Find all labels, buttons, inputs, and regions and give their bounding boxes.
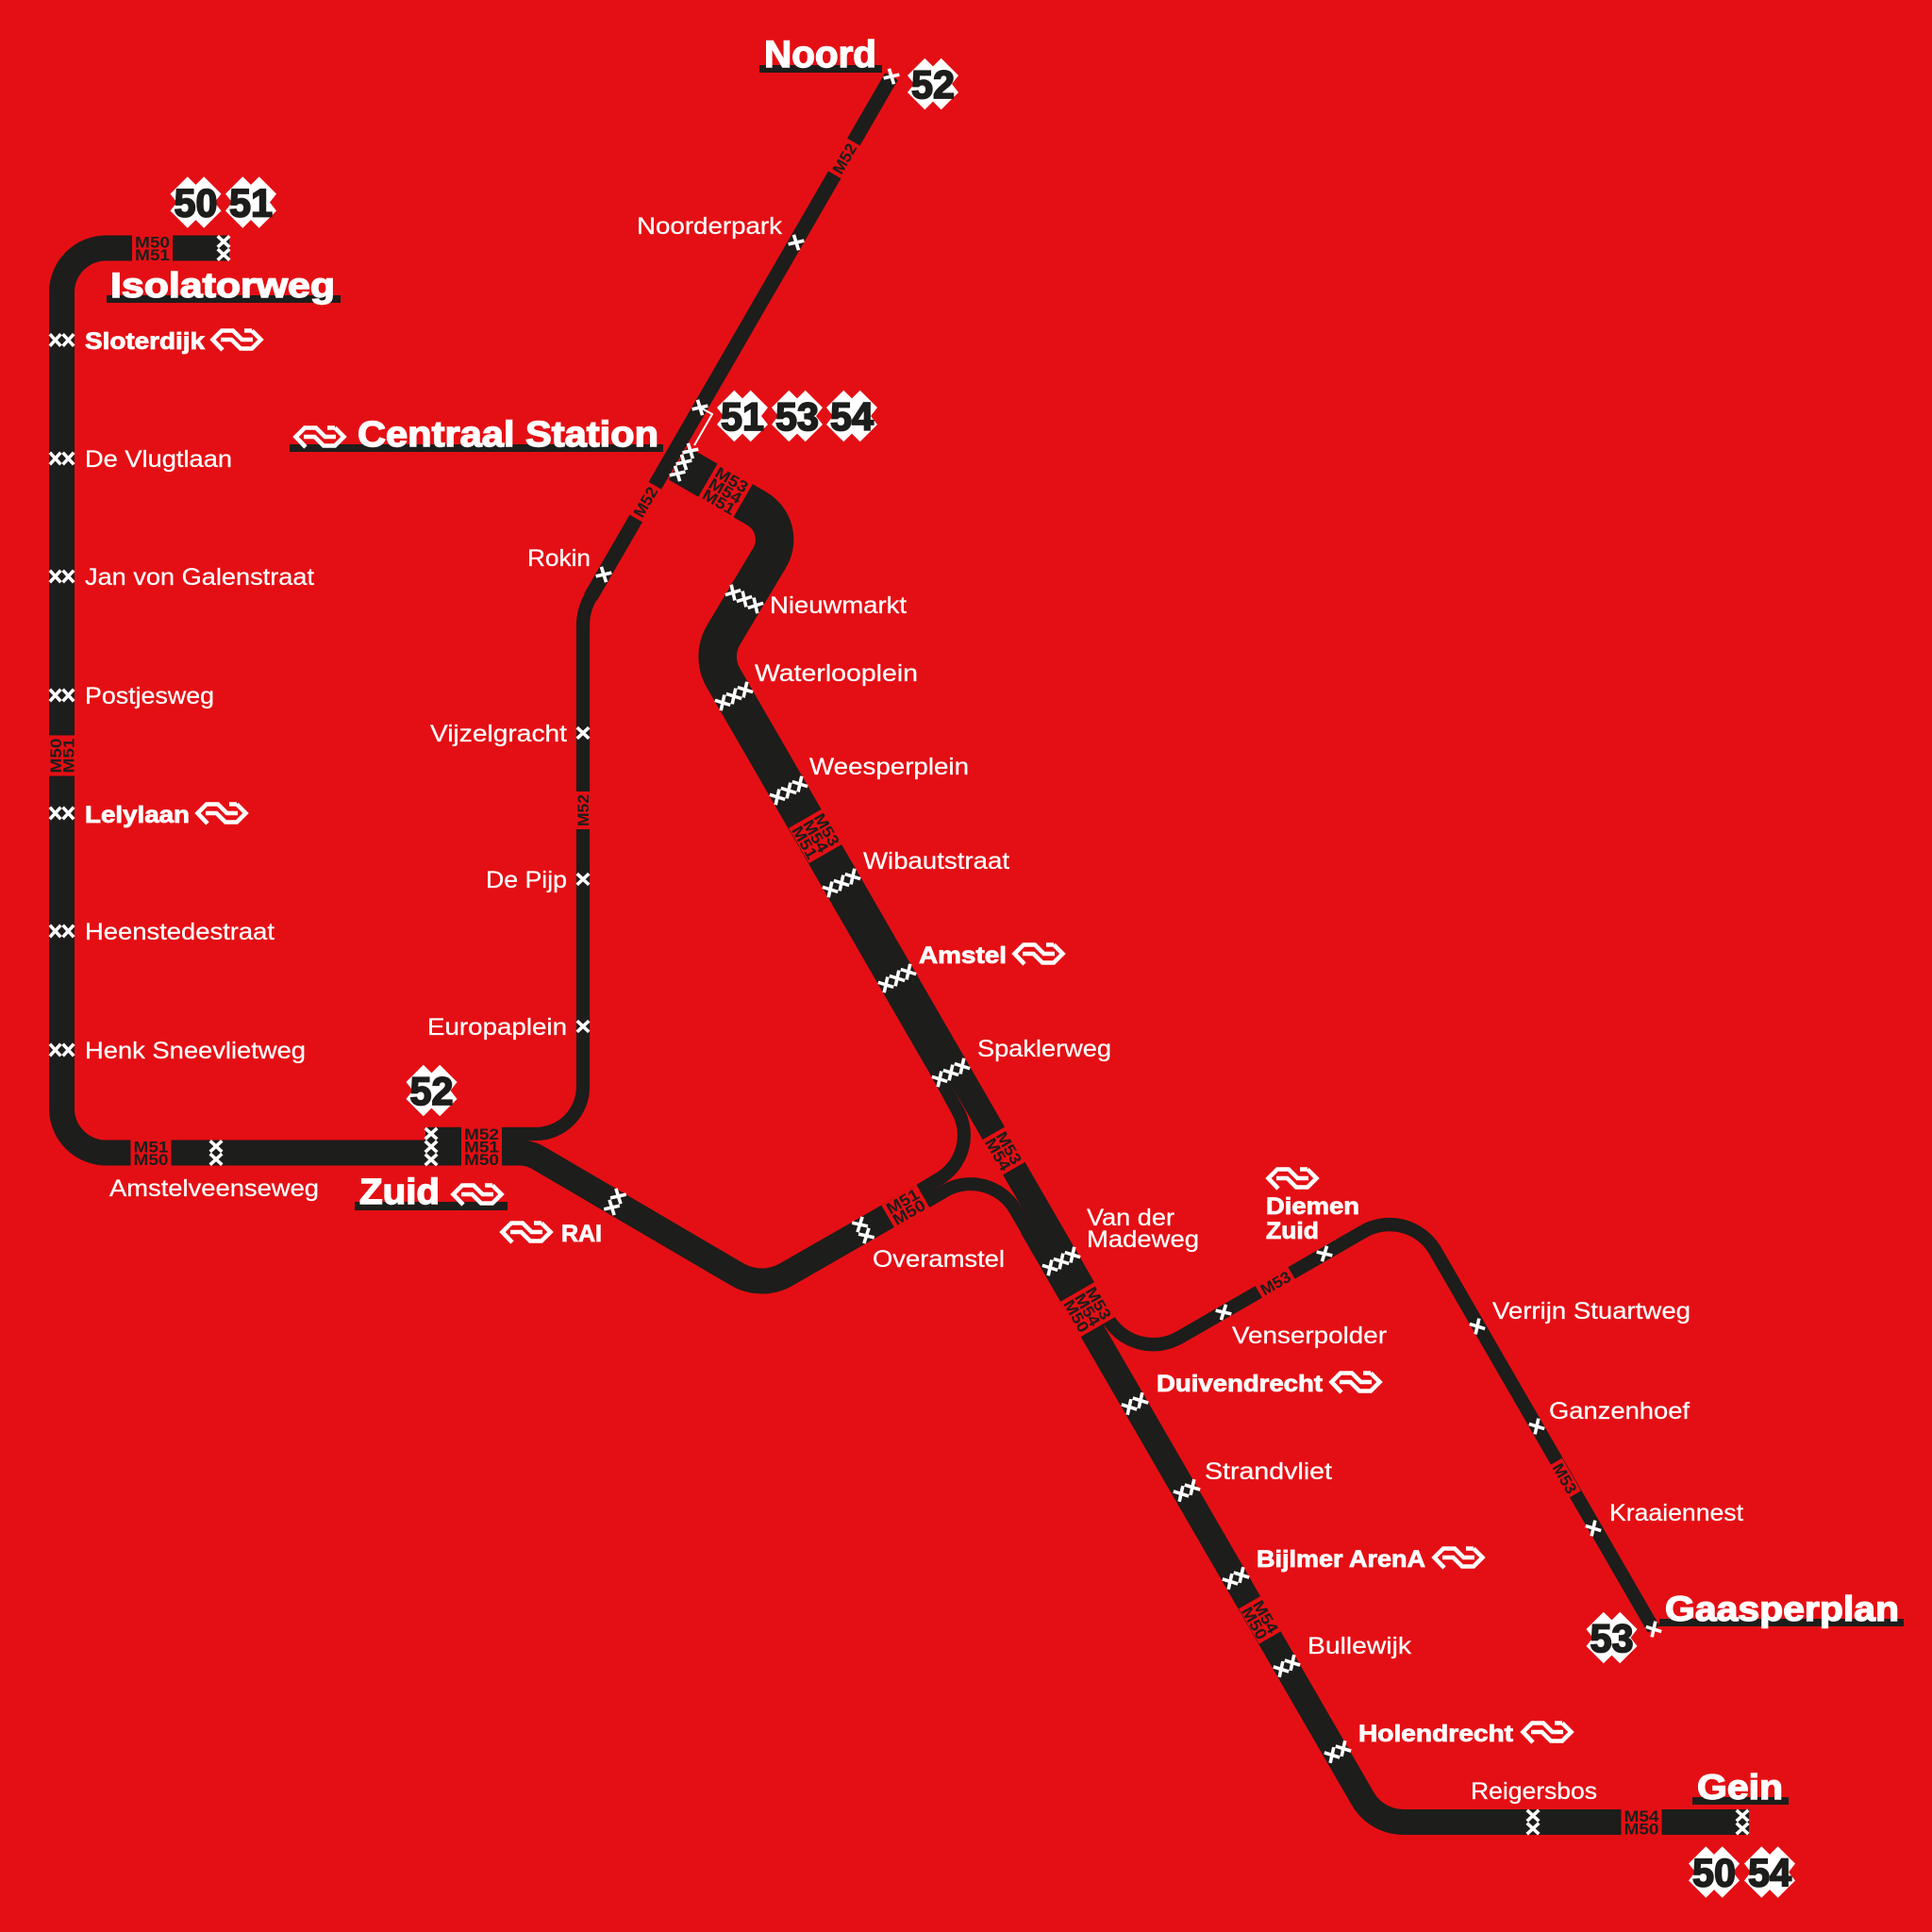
badge: 52 Zuid: 52: [409, 1069, 453, 1113]
label: M51 M50 arm: M50: [890, 1196, 928, 1229]
station names: Bijlmer ArenA: [1257, 1546, 1425, 1573]
label: M54 M50 bottom: [1621, 1807, 1662, 1838]
line: M53 M54 trunk: [947, 1052, 1105, 1325]
station names: De Pijp: [486, 867, 567, 893]
label: M52 M51 M50: M50: [464, 1151, 499, 1169]
label: M53 M54 M51 trunk: [787, 808, 844, 864]
label: M53 M54: M53: [992, 1128, 1025, 1168]
station names: Holendrecht: [1358, 1721, 1514, 1747]
line: M52 north diagonal: [591, 76, 891, 597]
station names: Madeweg: [1087, 1226, 1199, 1253]
station names: Amstel: [919, 942, 1007, 969]
label: M52 vertical: M52: [575, 794, 592, 826]
badge: 50 Gein: 50: [1692, 1851, 1736, 1894]
station names: Waterlooplein: [755, 660, 918, 687]
line: M51 upper fork: [920, 1061, 964, 1191]
terminal: Isolatorweg: Isolatorweg: [110, 266, 335, 305]
label: M53 M54 M51 Centraal: M51: [699, 486, 739, 519]
label: M50 M51 west: [47, 736, 77, 775]
station names: [85, 213, 1743, 1805]
connector: Centraal Station transfer: [694, 408, 712, 445]
station names: Spaklerweg: [977, 1036, 1111, 1062]
label: M53 M54 M51 Centraal: M54: [706, 475, 745, 508]
station names: Verrijn Stuartweg: [1492, 1298, 1690, 1324]
line: M53 to Gaasperplan: [1094, 1224, 1654, 1629]
label: M53 M54 M51 trunk: M51: [788, 823, 821, 862]
station names: Zuid: [1266, 1218, 1319, 1244]
badge: 51 Isolatorweg: 51: [229, 181, 273, 225]
station names: De Vlugtlaan: [85, 446, 232, 473]
station names: Nieuwmarkt: [770, 592, 907, 619]
terminal: Gein: Gein: [1697, 1768, 1783, 1807]
label: M53 M54: [980, 1126, 1026, 1176]
badge: 51 Centraal: 51: [721, 394, 764, 439]
label: M52 M51 M50: M52: [464, 1125, 499, 1143]
station names: RAI: [561, 1221, 602, 1247]
station names: Venserpolder: [1232, 1323, 1387, 1349]
label: M52 M51 M50: M51: [464, 1139, 499, 1157]
line: M50 lower fork: [920, 1184, 1045, 1261]
terminal: Zuid: [355, 1173, 508, 1212]
label: M50 M51 top: [132, 233, 173, 264]
station names: Reigersbos: [1471, 1778, 1597, 1805]
line: M52 to Zuid: [425, 587, 596, 1134]
label: M52 at Centraal: M52: [630, 484, 661, 521]
label: M54 M50 bottom: M50: [1624, 1820, 1658, 1838]
line: M50 M54 south to Gein: [1032, 1226, 1749, 1823]
label: M51 M50 arm: [881, 1184, 931, 1230]
label: M51 M50 south: M50: [134, 1151, 168, 1169]
label: M50 M51 top: M50: [135, 233, 170, 251]
icons: NS railway logos: [198, 330, 1572, 1742]
label: M51 M50 south: M51: [134, 1138, 168, 1156]
line: M50 M51 west branch and southern arc: [62, 248, 929, 1281]
label: M53 M54 M50: [1058, 1281, 1116, 1338]
station names: Van der: [1087, 1205, 1174, 1231]
label: M52 M51 M50: [461, 1125, 502, 1169]
badge: 54 Gein: 54: [1748, 1851, 1792, 1894]
station names: Duivendrecht: [1157, 1371, 1324, 1397]
station names: Rokin: [527, 545, 591, 572]
label: M50 M51 top: M51: [135, 246, 170, 264]
label: M50 M51 west: M51: [59, 738, 77, 774]
station names: Europaplein: [427, 1014, 567, 1041]
terminal: Gaasperplan: Gaasperplan: [1665, 1590, 1899, 1628]
station names: Overamstel: [873, 1246, 1005, 1273]
label: M53 M54 M50: M53: [1082, 1284, 1115, 1323]
label: M53 M54 M51 Centraal: M53: [712, 463, 751, 496]
station names: Heenstedestraat: [85, 919, 275, 945]
label: M51 M50 south: [130, 1138, 172, 1169]
line labels: [47, 138, 1662, 1838]
track network: [62, 76, 1749, 1823]
station names: Bullewijk: [1307, 1633, 1412, 1659]
badge: 53 Gaasperplan: 53: [1591, 1616, 1634, 1660]
label: M54 M50 diagonal: [1237, 1595, 1283, 1645]
label: M51 M50 arm: M51: [883, 1185, 923, 1218]
terminal: Centraal Station: Centraal Station: [358, 415, 658, 455]
station names: Noorderpark: [637, 213, 783, 240]
line: thick M51 M53 M54 from Centraal: [678, 463, 943, 1058]
station names: Wibautstraat: [863, 848, 1009, 874]
badge: 54 Centraal: 54: [830, 394, 874, 439]
label: M53 M54 M51 trunk: M54: [799, 817, 832, 857]
station names: Strandvliet: [1205, 1458, 1332, 1485]
label: M53 M54: M54: [981, 1135, 1014, 1174]
label: M53 east: M53: [1257, 1268, 1294, 1299]
label: M53 M54 M51 trunk: M53: [810, 810, 843, 849]
station names: Weesperplein: [809, 754, 969, 780]
station names: Ganzenhoef: [1549, 1398, 1690, 1424]
station names: Henk Sneevlietweg: [85, 1038, 306, 1064]
badge: 53 Centraal: 53: [775, 394, 819, 439]
label: M53 M54 M50: M50: [1059, 1296, 1092, 1336]
label: M54 M50 diagonal: M54: [1249, 1597, 1282, 1637]
station names: Sloterdijk: [85, 328, 205, 355]
label: M54 M50 diagonal: M50: [1238, 1604, 1271, 1642]
station names: Vijzelgracht: [430, 721, 567, 747]
label: M50 M51 west: M50: [47, 738, 65, 774]
station names: Diemen: [1266, 1193, 1359, 1220]
label: M53 M54 M51 Centraal: [697, 462, 754, 520]
terminal: Zuid: Zuid: [359, 1173, 440, 1212]
label: M54 M50 bottom: M54: [1624, 1807, 1659, 1825]
terminal: Noord: Noord: [764, 34, 876, 75]
station names: Postjesweg: [85, 683, 214, 709]
label: M53 M54 M50: M54: [1071, 1291, 1104, 1330]
station names: Jan von Galenstraat: [85, 564, 314, 591]
station names: Lelylaan: [85, 802, 190, 828]
station names: Amstelveenseweg: [109, 1175, 319, 1202]
label: M53 south-east: M53: [1549, 1460, 1580, 1497]
badge: 50 Isolatorweg: 50: [174, 181, 217, 225]
station names: Kraaiennest: [1609, 1500, 1743, 1526]
badge: 52 Noord: 52: [911, 62, 955, 107]
label: M52 north: M52: [829, 141, 860, 177]
